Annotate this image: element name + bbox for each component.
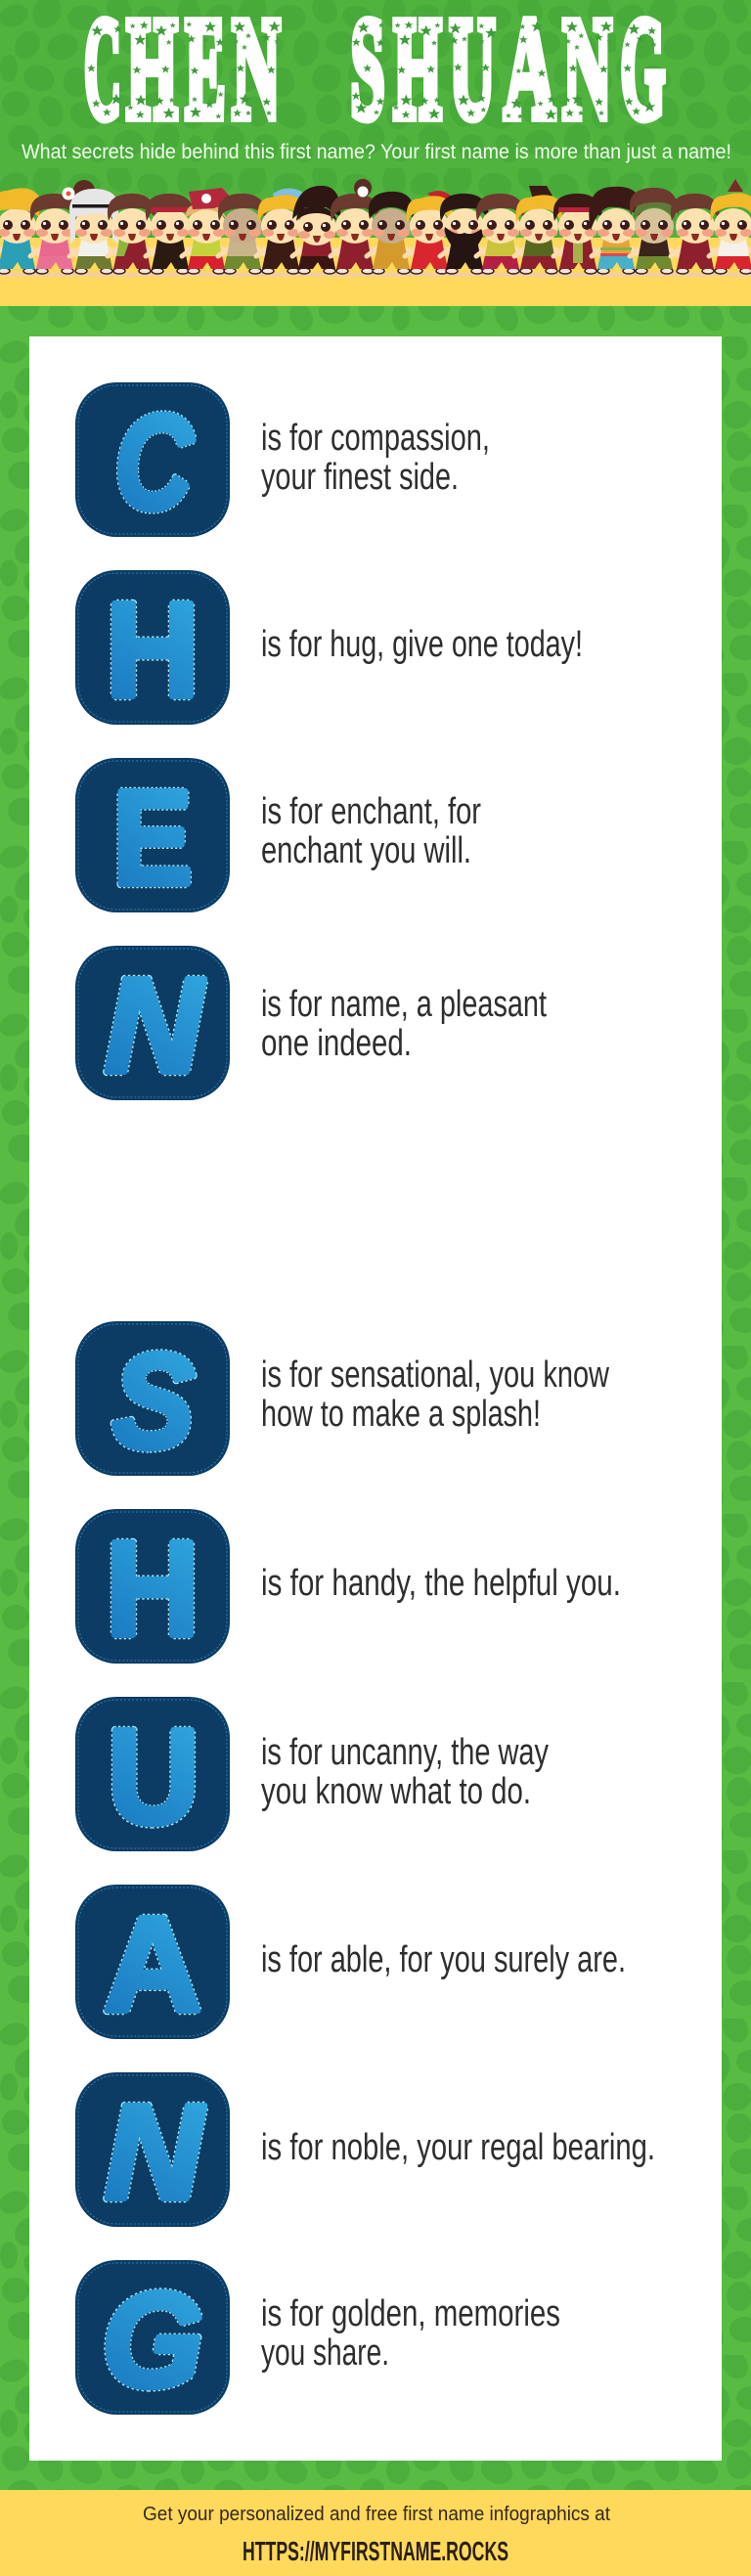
icon: letter U bbox=[75, 1697, 230, 1852]
icon: letter S: S bbox=[112, 1326, 195, 1477]
row: S bbox=[75, 1321, 609, 1477]
illustration: row of cartoon characters bbox=[0, 179, 751, 274]
icon: letter E bbox=[75, 758, 230, 913]
icon: letter A bbox=[75, 1885, 230, 2040]
icon: letter N: N bbox=[105, 951, 205, 1101]
text: E line bbox=[261, 791, 481, 871]
icon: letter N: N bbox=[105, 2077, 205, 2228]
icon: letter N: N bbox=[105, 2077, 205, 2228]
text: H line: is for handy, the helpful you. bbox=[261, 1563, 621, 1604]
icon: letter H: H bbox=[106, 1514, 199, 1665]
icon: letter A: A bbox=[104, 1889, 201, 2040]
row: N bbox=[75, 946, 547, 1101]
icon: letter C bbox=[75, 382, 230, 538]
text: G line bbox=[261, 2293, 560, 2374]
text: A line: is for able, for you surely are. bbox=[261, 1939, 626, 1980]
text: C line: your finest side. bbox=[261, 457, 459, 498]
icon: letter U: U bbox=[108, 1702, 199, 1852]
icon: letter N bbox=[75, 946, 230, 1101]
text: S line: is for sensational, you know bbox=[261, 1355, 609, 1396]
icon: letter G: G bbox=[102, 2265, 203, 2416]
text: U line: is for uncanny, the way bbox=[261, 1732, 549, 1773]
icon: letter C: C bbox=[114, 387, 195, 538]
footer band bbox=[0, 2490, 751, 2576]
row: H bbox=[75, 570, 583, 726]
icon: letter H: H bbox=[106, 575, 199, 726]
text: S line: how to make a splash! bbox=[261, 1394, 541, 1435]
row: G bbox=[75, 2260, 560, 2416]
text: N line bbox=[261, 984, 547, 1064]
text: U line: you know what to do. bbox=[261, 1771, 531, 1812]
row: C bbox=[75, 382, 490, 538]
text: U line bbox=[261, 1732, 549, 1812]
text: G line: is for golden, memories bbox=[261, 2293, 560, 2334]
row: N bbox=[75, 2072, 655, 2228]
icon: letter E: E bbox=[112, 763, 193, 913]
icon: letter G bbox=[75, 2260, 230, 2416]
row: U bbox=[75, 1697, 549, 1852]
title: CHEN SHUANG bbox=[84, 0, 665, 149]
text: G line: you share. bbox=[261, 2332, 389, 2374]
footer url: HTTPS://MYFIRSTNAME.ROCKS bbox=[243, 2536, 508, 2566]
icon: letter G: G bbox=[102, 2265, 203, 2416]
text: E line: enchant you will. bbox=[261, 830, 471, 871]
text: S line bbox=[261, 1355, 609, 1435]
header tint bbox=[0, 0, 751, 240]
icon: letter H: H bbox=[106, 1514, 199, 1665]
row: E bbox=[75, 758, 481, 913]
icon: letter A: A bbox=[104, 1889, 201, 2040]
icon: letter S: S bbox=[112, 1326, 195, 1477]
icon: letter N bbox=[75, 2072, 230, 2228]
icon: letter U: U bbox=[108, 1702, 199, 1852]
text: N line: one indeed. bbox=[261, 1023, 412, 1064]
panel: white content card bbox=[29, 336, 722, 2461]
yellow band behind characters bbox=[0, 238, 751, 306]
row: H bbox=[75, 1509, 621, 1665]
icon: letter H: H bbox=[106, 575, 199, 726]
icon: letter E: E bbox=[112, 763, 193, 913]
icon: letter H bbox=[75, 570, 230, 726]
text: H line: is for hug, give one today! bbox=[261, 624, 583, 665]
icon: letter C: C bbox=[114, 387, 195, 538]
text: N line: is for name, a pleasant bbox=[261, 984, 547, 1025]
icon: letter S bbox=[75, 1321, 230, 1477]
icon: letter N: N bbox=[105, 951, 205, 1101]
text: E line: is for enchant, for bbox=[261, 791, 481, 832]
text: C line: is for compassion, bbox=[261, 418, 490, 459]
text: C line bbox=[261, 418, 490, 498]
icon: letter H bbox=[75, 1509, 230, 1665]
footer text: Get your personalized and free first name infographics at bbox=[143, 2504, 610, 2525]
row: A bbox=[75, 1885, 626, 2040]
